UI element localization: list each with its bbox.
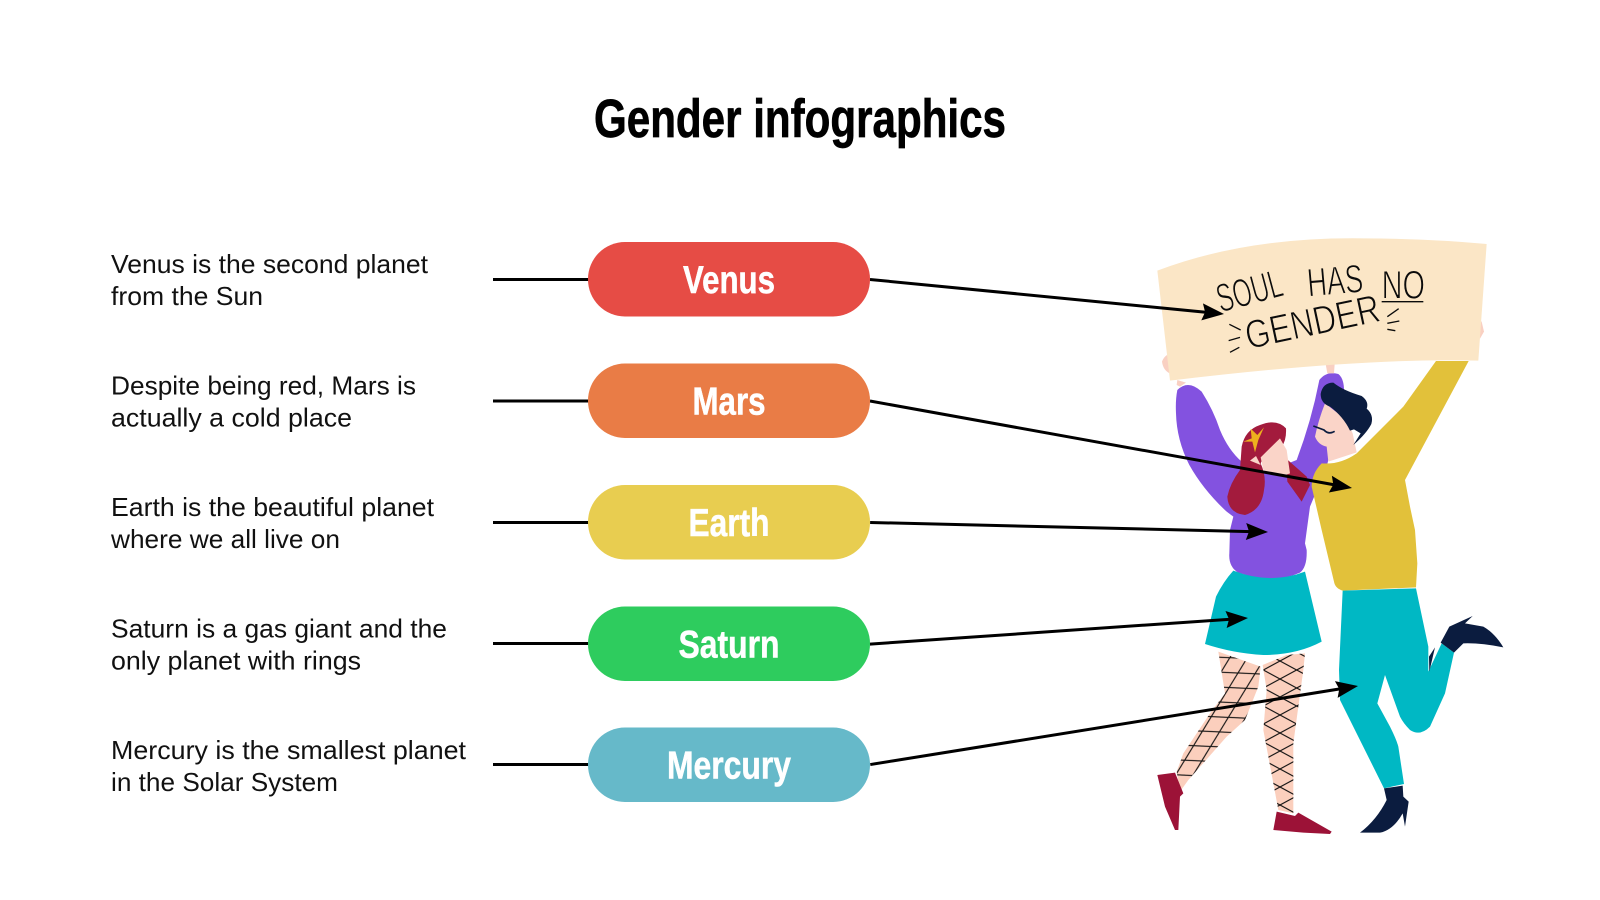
pill: Venus: [588, 242, 870, 316]
connector: Mercury: [869, 678, 1359, 773]
lead line: Venus: [493, 278, 590, 281]
description: Earth: [110, 492, 435, 554]
pill: Earth: [588, 485, 870, 560]
row: Venus: [111, 242, 870, 316]
woman's shoes: [1157, 773, 1332, 834]
pill: Saturn: Saturn: [678, 624, 780, 666]
description: Mars: [111, 370, 416, 432]
sign board: [1157, 238, 1487, 381]
row: Earth: [110, 485, 870, 560]
man's yellow sweater: [1312, 361, 1469, 591]
pill: Mercury: Mercury: [667, 744, 791, 788]
description: Saturn: [111, 614, 447, 676]
description: Mercury: [111, 735, 467, 797]
pill: Earth: Earth: [688, 502, 770, 545]
row: Saturn: [111, 606, 870, 681]
description: Mars: actually a cold place: [111, 402, 352, 432]
row: Mars: [111, 364, 870, 438]
woman's legs with fishnets: [1173, 650, 1307, 815]
word: NO: NO: [1382, 263, 1425, 307]
hand: center: [1326, 364, 1335, 373]
hair leaf ornament: [1243, 427, 1264, 452]
illustration: couple holding sign: [1157, 238, 1503, 834]
hand: right: [1473, 318, 1484, 339]
underline and burst marks: [1229, 302, 1423, 352]
lead line: Earth: [493, 521, 590, 524]
description: Mercury: in the Solar System: [111, 767, 338, 797]
pill: Saturn: [588, 606, 870, 681]
connector: Earth: [870, 514, 1268, 540]
description: Earth: Earth is the beautiful planet: [111, 492, 435, 522]
description: Mercury: Mercury is the smallest planet: [111, 735, 467, 765]
lead line: Mercury: [493, 763, 590, 766]
description: Saturn: Saturn is a gas giant and the: [111, 614, 447, 644]
hands of the couple: [1162, 318, 1484, 387]
description: Mars: Despite being red, Mars is: [111, 370, 416, 400]
word: SOUL: SOUL: [1212, 262, 1287, 321]
man's eye and brow line: [1313, 426, 1335, 433]
pill: Venus: Venus: [683, 259, 775, 302]
woman's hair: [1227, 422, 1310, 515]
word: HAS: HAS: [1305, 257, 1365, 306]
description: Venus: from the Sun: [111, 281, 263, 311]
man's boots: [1360, 616, 1503, 833]
pill: Mars: [588, 364, 870, 438]
pill: Mars: Mars: [692, 380, 766, 424]
lead line: Mars: [493, 400, 590, 402]
connector: Mars: [868, 393, 1354, 496]
skirt: [1205, 571, 1322, 655]
connector: Venus: [869, 271, 1225, 322]
woman's purple sweater: [1176, 373, 1344, 579]
connector: Saturn: [869, 610, 1249, 653]
man's hair: [1321, 383, 1372, 445]
woman's face: [1250, 438, 1290, 475]
description: Venus: [111, 249, 429, 311]
sign lettering: [1212, 257, 1425, 358]
title: Gender infographics: [594, 89, 1006, 149]
description: Venus: Venus is the second planet: [111, 249, 429, 279]
description: Earth: where we all live on: [110, 524, 340, 554]
lead line: Saturn: [493, 642, 590, 645]
row: Mercury: [111, 728, 870, 802]
description: Saturn: only planet with rings: [111, 646, 361, 676]
pill: Mercury: [588, 728, 870, 802]
man's neck and face: [1315, 403, 1357, 462]
hand: left: [1162, 353, 1186, 387]
trousers: [1339, 588, 1454, 788]
word: GENDER: GENDER: [1241, 287, 1384, 358]
